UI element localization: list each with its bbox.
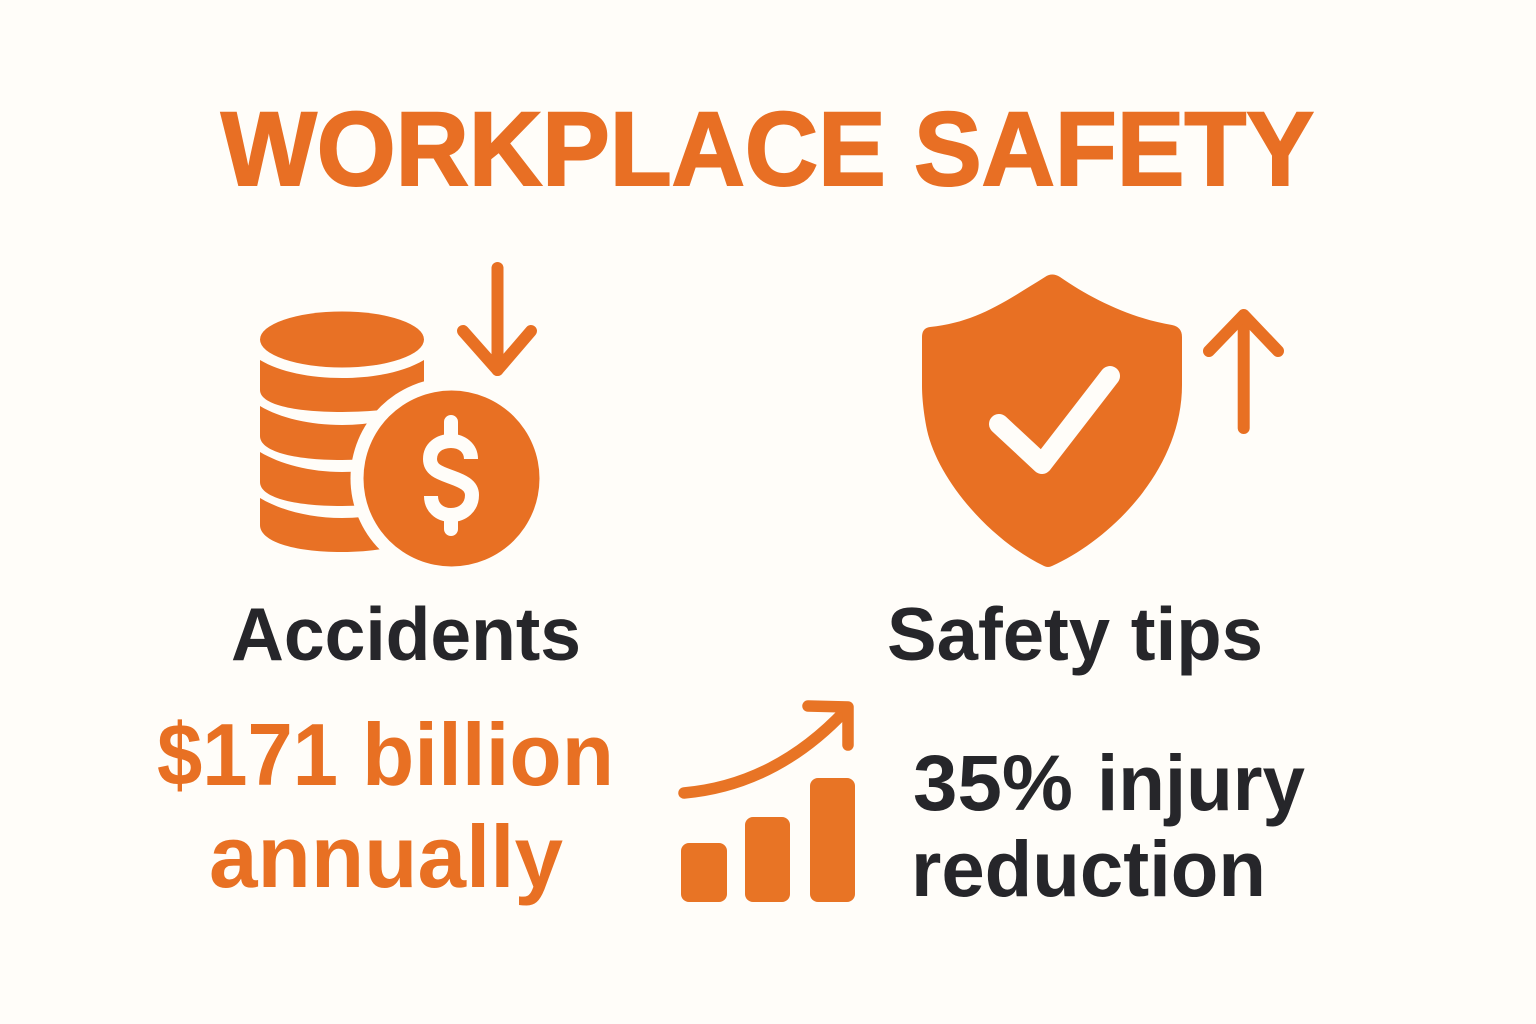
- arrow: down: [463, 268, 531, 370]
- stat: 35% injury reduction: injury: [1097, 738, 1305, 827]
- stat: 35% injury reduction: reduction: [911, 824, 1266, 913]
- stack of coins: [260, 312, 424, 552]
- dollar coin: [364, 390, 540, 566]
- label: safety tips: Safety tips: [887, 592, 1263, 676]
- icon: shield with check mark: [922, 274, 1182, 567]
- bars: [681, 778, 855, 902]
- icon: rising bar chart with arrow: [681, 706, 855, 902]
- stat: $171 billion annually: billion: [362, 705, 614, 804]
- stat: 35% injury reduction: [911, 738, 1305, 913]
- stat: $171 billion annually: $171: [157, 705, 338, 804]
- label: accidents: Accidents: [231, 592, 581, 676]
- stat: $171 billion annually: annually: [209, 807, 563, 906]
- stat: $171 billion annually: [157, 705, 614, 906]
- arrow: up: [1209, 315, 1278, 428]
- stat: 35% injury reduction: 35%: [913, 738, 1073, 827]
- rising arrow: [684, 706, 848, 793]
- icon: coin stack with dollar coin: [260, 312, 552, 580]
- title: WORKPLACE SAFETY: [221, 91, 1314, 208]
- check mark: [999, 376, 1110, 464]
